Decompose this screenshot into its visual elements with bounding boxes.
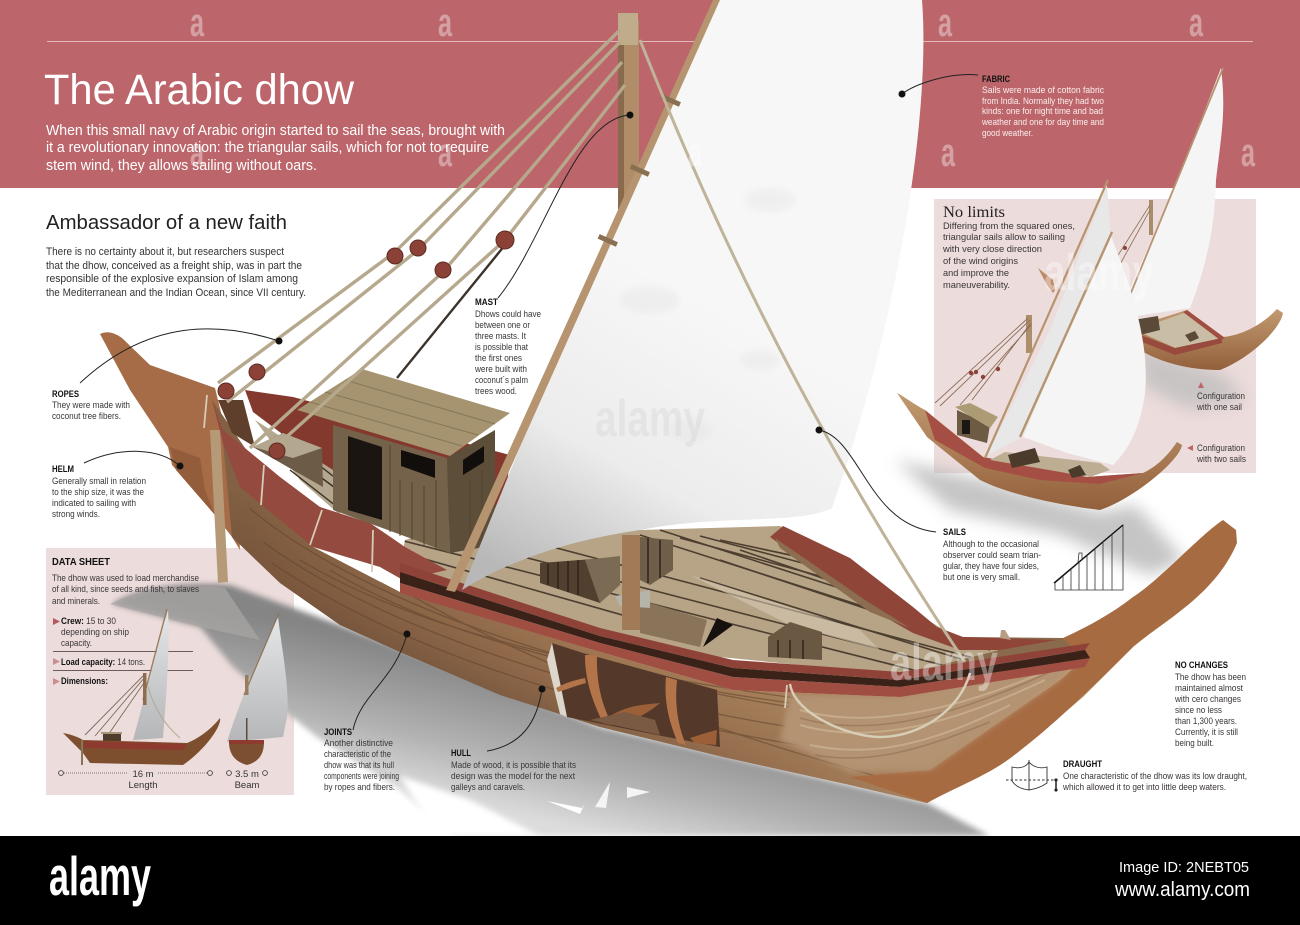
callout: joints: characteristic of the — [324, 748, 391, 759]
header banner — [0, 0, 1300, 188]
callout: configuration with two sails: with two sails — [1196, 453, 1246, 464]
icon: sail diagram — [1054, 525, 1123, 590]
small crates — [1008, 448, 1040, 468]
bow interior — [900, 625, 1092, 677]
small cabin — [957, 410, 990, 443]
heading: ambassador of a new faith: Ambassador of a new faith — [46, 212, 287, 234]
callout: joints: components were joining — [324, 770, 399, 781]
illustration: main dhow — [100, 0, 1237, 803]
panel: data sheet text: Dimensions: — [61, 675, 108, 686]
callout: sails: observer could seam trian- — [943, 549, 1041, 560]
stern block — [218, 400, 255, 447]
dimension: beam — [227, 769, 267, 791]
watermarks: a — [438, 1, 452, 45]
panel: no limits text — [942, 204, 1075, 290]
callout: mast: the first ones — [475, 352, 522, 363]
stern post — [100, 332, 240, 550]
callout: helm: HELM — [52, 464, 74, 474]
rigging ropes and pulleys — [218, 30, 625, 459]
far gunwale bow side — [770, 526, 1057, 650]
text block: no changes — [1174, 660, 1246, 748]
helm — [170, 447, 215, 515]
panel: no limits text: maneuverability. — [943, 279, 1010, 290]
bow post — [850, 520, 1237, 803]
stern deck — [255, 420, 340, 515]
panel: data sheet text: Load capacity: 14 tons. — [61, 656, 145, 667]
text block: ambassador body: the Mediterranean and the Indian Ocean, since VII century. — [46, 287, 306, 299]
callout: mast — [474, 112, 634, 396]
callout: fabric: FABRIC — [982, 74, 1010, 84]
callout: fabric: good weather. — [982, 127, 1033, 138]
text block: ambassador body: There is no certainty about it, but researchers suspect — [46, 246, 284, 258]
callout: mast: is possible that — [475, 341, 528, 352]
text block: ambassador body: that the dhow, conceived as a freight ship, was in part the — [46, 260, 302, 272]
panel: data sheet text: capacity. — [61, 637, 92, 648]
stern crate — [253, 433, 323, 487]
panel: data sheet text: of all kind, since seeds and fish, to slaves — [52, 583, 199, 594]
callout: ropes: ROPES — [52, 389, 79, 399]
text block: no changes: NO CHANGES — [1175, 660, 1228, 670]
callout: hull: galleys and caravels. — [451, 781, 525, 792]
text block: draught: which allowed it to get into little deep waters. — [1062, 781, 1226, 792]
hatch and hold — [615, 590, 733, 647]
callout: helm: indicated to sailing with — [52, 497, 136, 508]
illustration: back dhow one sail — [1038, 68, 1283, 370]
intro text: it a revolutionary innovation: the triangular sails, which for not to require — [46, 140, 489, 156]
far side bulwark — [245, 390, 510, 560]
callout: hull: design was the model for the next — [451, 770, 575, 781]
callout: sails: Although to the occasional — [943, 538, 1039, 549]
text block: ambassador body: responsible of the explosive expansion of Islam among — [46, 273, 298, 285]
watermarks: alamy — [595, 390, 705, 448]
panel: data sheet text: depending on ship — [61, 626, 129, 637]
callout: mast: were built with — [474, 363, 527, 374]
main sail — [462, 0, 923, 590]
watermarks: a — [688, 131, 702, 175]
title: The Arabic dhow — [44, 66, 355, 114]
panel: no limits text: with very close direction — [942, 243, 1042, 254]
rudder post — [210, 430, 228, 583]
text block: draught: One characteristic of the dhow was its low draught, — [1063, 770, 1247, 781]
callout: ropes: coconut tree fibers. — [52, 410, 121, 421]
watermarks: a — [941, 131, 955, 175]
panel: data sheet text — [52, 556, 199, 686]
callout: helm: to the ship size, it was the — [52, 486, 144, 497]
callout: ropes: They were made with — [52, 399, 130, 410]
pale hull planking — [780, 652, 1085, 772]
dimension: length — [59, 769, 212, 791]
rope ties — [204, 395, 787, 708]
text block: no changes: being built. — [1175, 737, 1214, 748]
text block: ambassador body — [46, 246, 306, 299]
callout: joints: JOINTS — [324, 727, 352, 737]
small mast and ropes — [1026, 315, 1032, 353]
callout: configuration with two sails: Configuration — [1197, 442, 1245, 453]
text block: draught — [1062, 759, 1247, 792]
watermarks — [190, 1, 1255, 692]
image id: Image ID: 2NEBT05 — [1119, 859, 1249, 876]
callout: mast: Dhows could have — [475, 308, 541, 319]
text block: no changes: maintained almost — [1175, 682, 1243, 693]
watermarks: a — [1189, 1, 1203, 45]
watermarks: a — [190, 131, 204, 175]
callout: hull — [451, 686, 576, 792]
callout: joints — [324, 630, 410, 792]
hull — [212, 400, 1237, 803]
callout: configuration with one sail: with one sail — [1196, 401, 1242, 412]
watermarks: a — [938, 1, 952, 45]
callout: helm: Generally small in relation — [52, 475, 146, 486]
lower mast — [622, 535, 640, 630]
callout: configuration with one sail — [1196, 382, 1245, 412]
mooring rope — [790, 673, 970, 737]
text block: draught: DRAUGHT — [1063, 759, 1102, 769]
callout: sails — [816, 426, 1041, 582]
callout: joints: dhow was that its hull — [324, 759, 394, 770]
watermarks: a — [438, 131, 452, 175]
cargo crates — [540, 537, 822, 660]
panel: data sheet text: Crew: 15 to 30 — [61, 615, 116, 626]
illustration: front dhow two sails — [897, 180, 1182, 510]
panel: data sheet text: and minerals. — [52, 595, 100, 606]
callout: sails: but one is very small. — [943, 571, 1020, 582]
rear sail — [987, 185, 1111, 455]
callout: mast: coconut´s palm — [475, 374, 528, 385]
panel: data sheet background — [46, 548, 294, 795]
callout: fabric: kinds: one for night time and bad — [982, 105, 1103, 116]
dimension: length: 16 m — [132, 769, 154, 780]
callout: fabric: from India. Normally they had two — [982, 95, 1104, 106]
callout: helm — [52, 451, 184, 519]
panel: data sheet text: DATA SHEET — [52, 556, 111, 568]
hull cutaway — [547, 643, 720, 747]
panel: no limits background — [934, 199, 1256, 473]
text block: no changes: Currently, it is still — [1175, 726, 1238, 737]
panel: no limits text: No limits — [943, 204, 1005, 221]
callout: hull: Made of wood, it is possible that its — [451, 759, 576, 770]
ground shadow of small dhows — [895, 345, 1245, 575]
text block: no changes: than 1,300 years. — [1175, 715, 1237, 726]
callout: configuration with one sail: Configuration — [1197, 390, 1245, 401]
near side red wale — [212, 400, 1090, 697]
intro text — [46, 123, 505, 174]
dimension: beam: Beam — [235, 780, 259, 791]
dimension: beam: 3.5 m — [235, 769, 259, 780]
callout: ropes — [52, 329, 282, 421]
text block: no changes: The dhow has been — [1175, 671, 1246, 682]
callout: fabric — [898, 74, 1104, 138]
callout: joints: by ropes and fibers. — [324, 781, 395, 792]
panel: no limits text: of the wind origins — [943, 255, 1018, 266]
dimension: length: Length — [128, 780, 158, 791]
watermarks: alamy — [890, 634, 998, 692]
mast — [618, 13, 639, 240]
watermarks: alamy — [1044, 244, 1154, 302]
illustration: front view of dhow — [227, 613, 288, 765]
intro text: When this small navy of Arabic origin started to sail the seas, brought with — [46, 123, 505, 139]
sheet rope — [640, 40, 965, 662]
panel: no limits text: and improve the — [943, 267, 1009, 278]
panel: data sheet text: The dhow was used to load merchandise — [52, 572, 199, 583]
callout: fabric: weather and one for day time and — [981, 116, 1104, 127]
figure for scale — [1000, 630, 1011, 640]
callout: mast: trees wood. — [475, 385, 517, 396]
callout: mast: three masts. It — [475, 330, 526, 341]
deck planks — [404, 526, 1000, 672]
panel: no limits text: triangular sails allow to sailing — [943, 231, 1065, 242]
callout: fabric: Sails were made of cotton fabric — [982, 84, 1104, 95]
watermarks: a — [1241, 131, 1255, 175]
website: www.alamy.com — [1114, 879, 1250, 901]
watermarks: a — [190, 1, 204, 45]
footer bar — [0, 836, 1300, 925]
yard — [446, 0, 720, 592]
ground shadow of main dhow — [110, 584, 990, 836]
cabin — [297, 369, 510, 553]
text block: no changes: with cero changes — [1174, 693, 1241, 704]
callout: configuration with two sails — [1187, 442, 1246, 464]
front sail — [1023, 233, 1146, 465]
callout: mast: between one or — [475, 319, 530, 330]
callout: hull: HULL — [451, 748, 471, 758]
panel: no limits text: Differing from the squared ones, — [943, 220, 1075, 231]
intro text: stem wind, they allows sailing without oars. — [46, 158, 317, 174]
small hull — [897, 393, 1182, 510]
alamy logo: alamy — [49, 845, 151, 907]
callout: mast: MAST — [475, 297, 498, 307]
callout: joints: Another distinctive — [324, 737, 393, 748]
illustration: side view of dhow — [63, 609, 220, 765]
icon: draught hull section — [1006, 760, 1057, 791]
callout: sails: gular, they have four sides, — [943, 560, 1039, 571]
callout: helm: strong winds. — [52, 508, 100, 519]
text block: no changes: since no less — [1175, 704, 1222, 715]
callout: sails: SAILS — [943, 527, 966, 537]
